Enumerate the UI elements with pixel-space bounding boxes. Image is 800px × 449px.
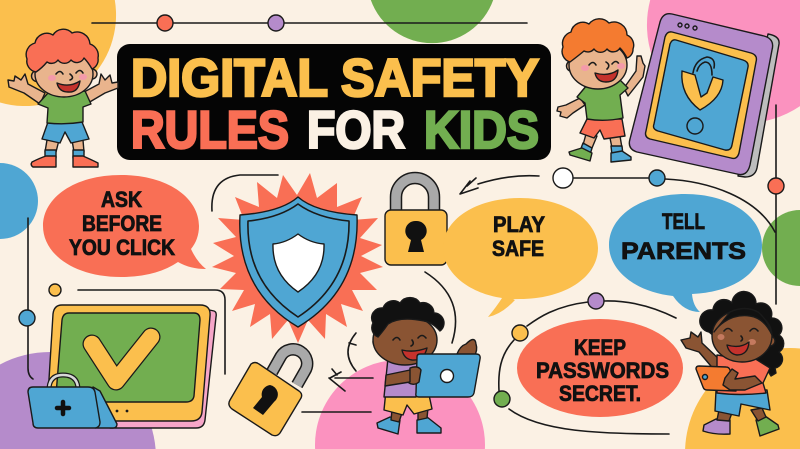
head — [32, 70, 42, 82]
plus icon — [57, 402, 69, 414]
shirt — [577, 80, 628, 120]
dots — [116, 410, 118, 412]
hair — [26, 29, 98, 72]
white inner shield — [273, 234, 324, 292]
raised hand — [457, 340, 477, 357]
face — [56, 70, 83, 80]
text: passwords: PASSWORDS — [536, 358, 669, 383]
bubble: play safe — [443, 198, 598, 317]
head — [765, 336, 775, 346]
hair — [562, 19, 634, 62]
bubble: tell parents — [609, 194, 762, 312]
hand on tablet — [409, 367, 421, 384]
tablet body — [629, 14, 773, 175]
padlock bottom — [229, 349, 307, 436]
shirt — [384, 352, 420, 397]
title line 1: DIGITAL SAFETY — [131, 49, 539, 108]
shirt — [717, 355, 770, 394]
legs — [717, 408, 766, 421]
text: tell: TELL — [662, 209, 705, 234]
padlock top — [385, 178, 447, 265]
yellow frame — [646, 32, 756, 158]
yellow body — [47, 305, 210, 421]
text: you click: YOU CLICK — [69, 235, 175, 260]
tablet side — [738, 34, 779, 177]
phone hand — [723, 369, 762, 390]
kid: left waving boy — [8, 29, 118, 167]
head — [566, 60, 578, 72]
tablet with lock shield — [629, 14, 779, 177]
face — [393, 336, 426, 346]
title word RULES: RULES — [131, 101, 289, 160]
text: ask: ASK — [101, 187, 142, 212]
hair — [372, 298, 444, 337]
legs — [391, 408, 428, 422]
legs — [583, 134, 622, 148]
long hair — [700, 292, 784, 376]
keyhole — [253, 385, 278, 415]
arms — [8, 74, 118, 104]
green screen — [56, 313, 200, 402]
kid: center boy with tablet — [372, 298, 480, 434]
head — [373, 337, 383, 347]
shoes — [703, 419, 730, 434]
keyhole — [405, 221, 427, 252]
text: safe: SAFE — [492, 236, 544, 261]
orange phone — [696, 366, 736, 391]
face — [724, 328, 758, 341]
blue tablet — [416, 354, 480, 397]
shirt — [38, 91, 91, 124]
tablet dots — [678, 23, 682, 27]
kid: top right boy — [557, 19, 645, 162]
kid: right girl with phone — [681, 292, 784, 436]
title banner — [117, 44, 551, 160]
bubble: ask before you click — [43, 175, 206, 277]
shorts — [42, 122, 89, 143]
pink back panel — [110, 309, 216, 428]
starburst — [212, 173, 383, 343]
text: parents: PARENTS — [621, 238, 746, 265]
bubble: keep passwords secret — [517, 319, 683, 417]
shoes — [569, 148, 592, 161]
shorts — [580, 119, 625, 139]
shield — [240, 197, 357, 327]
text: keep: KEEP — [574, 335, 626, 360]
shorts — [384, 390, 432, 415]
shoes — [377, 417, 441, 434]
title word FOR: FOR — [307, 101, 405, 160]
text: play: PLAY — [493, 212, 545, 237]
text: secret: SECRET. — [559, 381, 641, 406]
blue screen — [654, 40, 748, 150]
shield lock — [682, 71, 723, 110]
shorts — [715, 390, 770, 416]
shoes — [31, 156, 98, 167]
legs — [45, 140, 84, 152]
arm — [681, 332, 720, 372]
arms — [557, 56, 645, 118]
title word KIDS: KIDS — [424, 101, 539, 160]
check mark — [92, 337, 151, 381]
monitor with check mark — [47, 305, 216, 428]
face — [589, 62, 619, 69]
text: before: BEFORE — [82, 211, 162, 236]
blue briefcase — [28, 375, 117, 428]
